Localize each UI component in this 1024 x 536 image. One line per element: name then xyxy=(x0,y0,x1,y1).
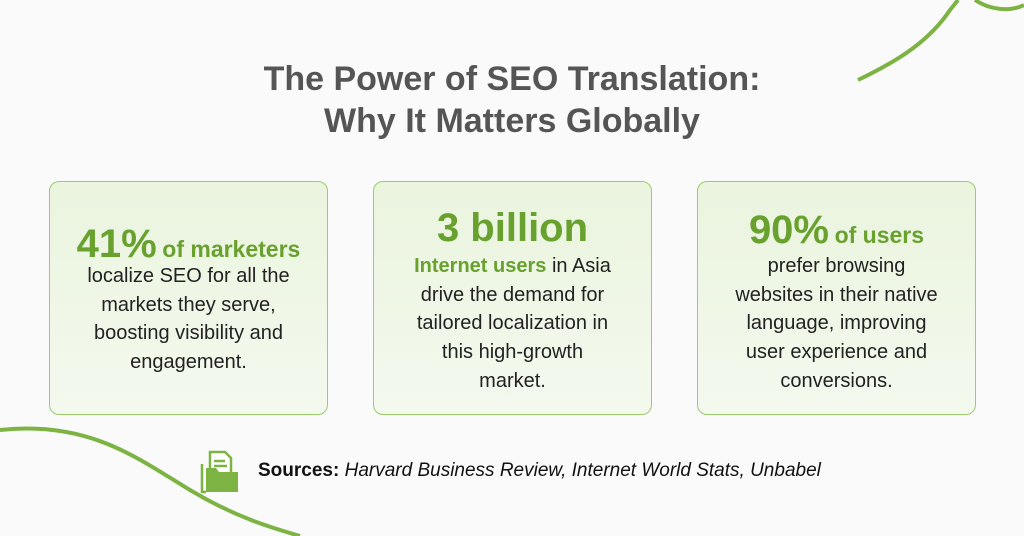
body text xyxy=(735,255,938,392)
body text: engagement. xyxy=(130,351,247,373)
stat headline: 41% of marketers xyxy=(77,222,300,266)
body text: markets they serve, xyxy=(101,294,276,316)
body text: boosting visibility and xyxy=(94,322,283,344)
body text: conversions. xyxy=(780,370,893,392)
body text: websites in their native xyxy=(735,284,938,306)
title xyxy=(264,60,760,140)
panel: 41% marketers xyxy=(49,181,328,415)
body text: user experience and xyxy=(746,341,927,363)
body text: market. xyxy=(479,370,546,392)
sources text: Sources: Harvard Business Review, Internet World Stats, Unbabel xyxy=(258,460,821,481)
body text: tailored localization in xyxy=(417,312,608,334)
body text: this high-growth xyxy=(442,341,583,363)
title: Why It Matters Globally xyxy=(324,102,700,140)
body text: prefer browsing xyxy=(768,255,905,277)
stat headline: 3 billion xyxy=(437,206,588,250)
sources xyxy=(200,450,822,494)
panel: 90% users xyxy=(697,181,976,415)
stat headline: 90% of users xyxy=(749,208,924,252)
body text: language, improving xyxy=(746,312,927,334)
panel: 3 billion xyxy=(373,181,652,415)
icon: folder xyxy=(200,450,238,494)
body text xyxy=(87,265,290,373)
title: The Power of SEO Translation: xyxy=(264,60,760,98)
body text: drive the demand for xyxy=(421,284,604,306)
body text: localize SEO for all the xyxy=(87,265,290,287)
body text: Internet users in Asia xyxy=(414,255,611,277)
body text xyxy=(414,255,611,392)
